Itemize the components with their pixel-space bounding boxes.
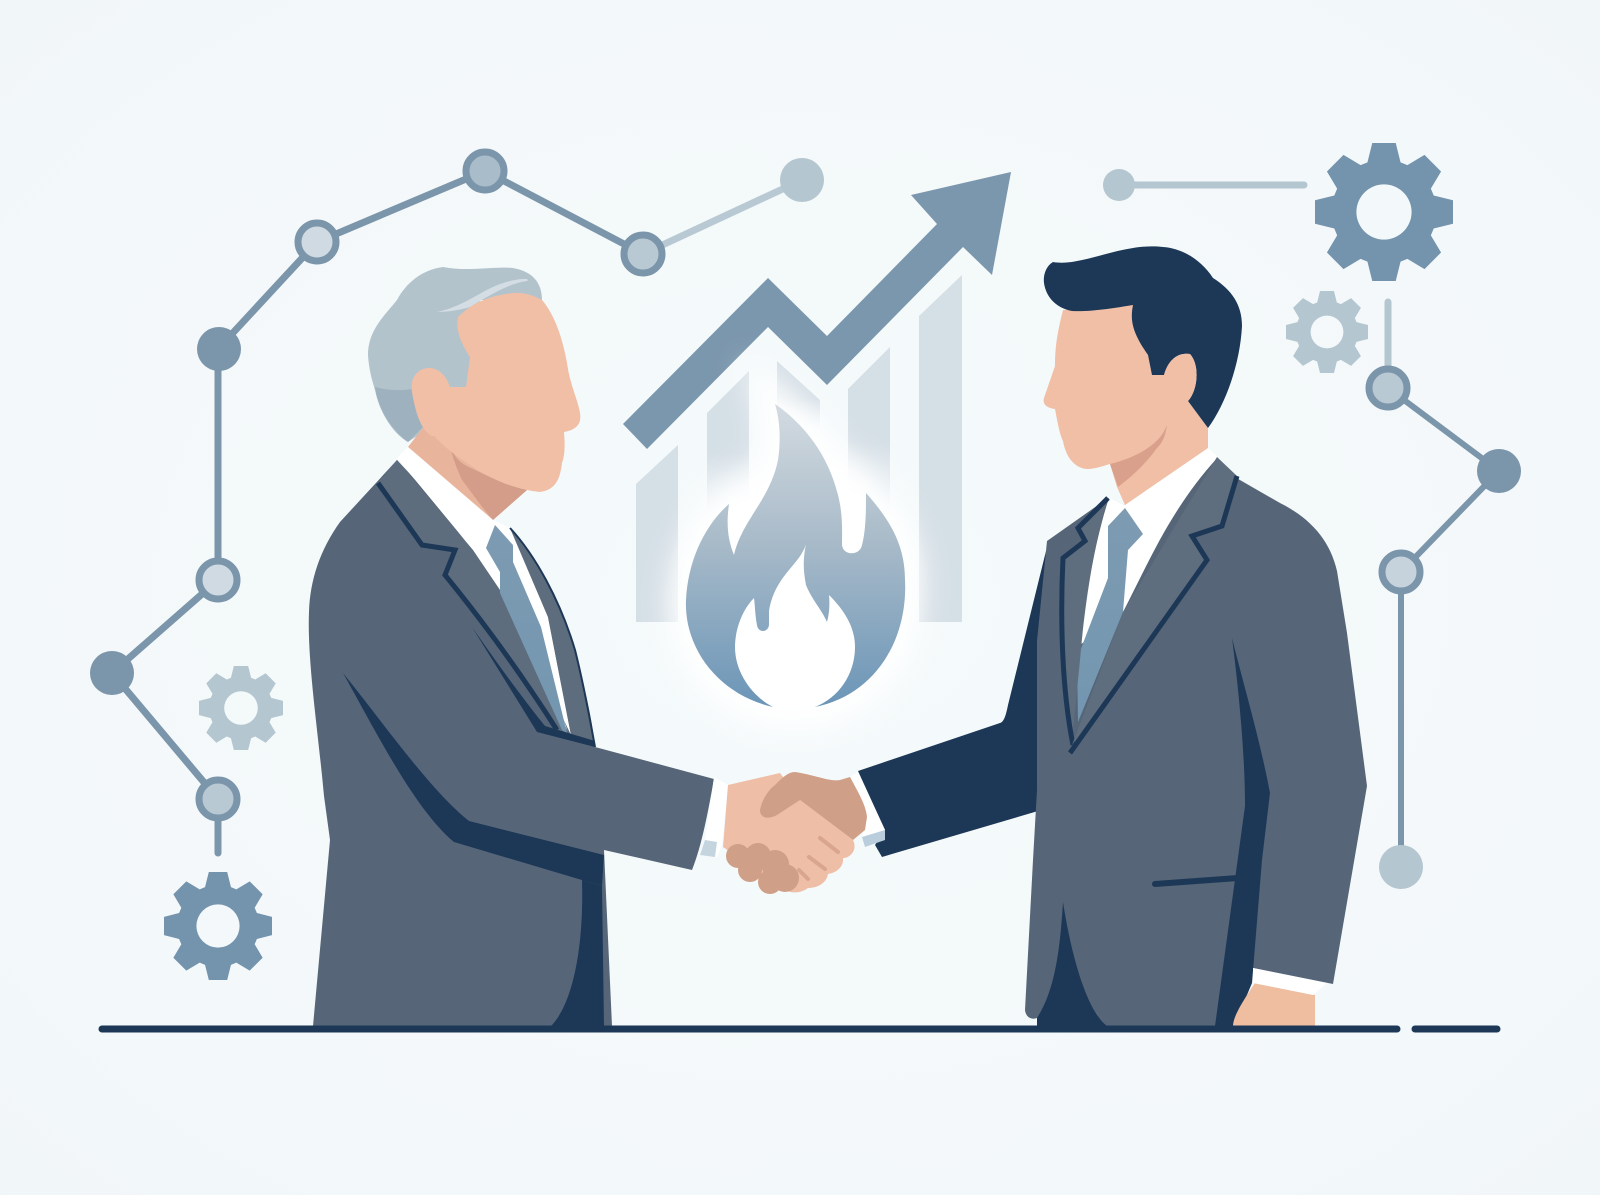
- flame glow: [686, 404, 905, 712]
- left man: [309, 267, 714, 1026]
- right man hair: [1044, 246, 1242, 428]
- right man ear: [1164, 354, 1197, 402]
- right man shirt: [1080, 448, 1218, 645]
- left man body shadow: [343, 673, 604, 886]
- left cuff light: [700, 840, 717, 857]
- bar chart: [636, 275, 962, 622]
- right man tie: [1077, 508, 1143, 722]
- right man left lapel line: [1062, 498, 1108, 745]
- right man left lapel: [1062, 498, 1108, 741]
- right man lower cuff: [1253, 968, 1327, 995]
- flame inner: [735, 544, 855, 707]
- gear: small left: [199, 666, 283, 750]
- right man: [858, 246, 1367, 1026]
- left man lapel line: [378, 483, 557, 730]
- left man tie: [486, 525, 567, 733]
- left man face: [430, 293, 580, 492]
- ground line: [102, 1026, 1497, 1032]
- gear: small right: [1286, 291, 1368, 373]
- handshake: [700, 772, 885, 894]
- right man sleeve: [858, 551, 1046, 857]
- left man left lapel: [378, 460, 568, 735]
- right network: [1103, 169, 1521, 889]
- left man lower hair: [375, 387, 425, 442]
- left man jacket edge line: [510, 528, 595, 747]
- right man right lapel: [1072, 457, 1237, 745]
- fingers: [726, 843, 799, 894]
- gear: large left: [164, 872, 272, 980]
- finger lines: [799, 838, 838, 879]
- right man vent: [1037, 902, 1107, 1026]
- left cuff: [700, 777, 728, 857]
- left network nodes: [90, 152, 824, 818]
- left man neck: [408, 425, 527, 520]
- growth arrow: [623, 172, 1011, 449]
- front hand: [723, 773, 855, 892]
- right man lower hand: [1233, 983, 1315, 1026]
- left man jacket: [309, 460, 714, 1026]
- flame: [686, 404, 905, 707]
- right man right lapel line: [1070, 476, 1237, 753]
- left man neck shadow: [448, 435, 527, 520]
- left man jacket edge: [510, 528, 595, 747]
- left man shirt: [397, 447, 571, 735]
- right man pocket: [1155, 878, 1238, 884]
- right man jacket: [1025, 457, 1367, 1026]
- right man neck shadow: [1110, 425, 1167, 487]
- right man arm shadow: [1215, 638, 1270, 1026]
- left man vent: [551, 880, 604, 1026]
- right man neck and face: [1044, 305, 1208, 505]
- back hand: [760, 772, 867, 840]
- right cuff light: [862, 830, 885, 847]
- left man ear: [412, 368, 450, 436]
- left man pocket line: [472, 627, 595, 747]
- right cuff: [850, 772, 885, 837]
- left man hair: [368, 267, 542, 442]
- left man hair highlight: [437, 279, 528, 312]
- left network line: [112, 171, 802, 853]
- gear: large right: [1315, 143, 1453, 281]
